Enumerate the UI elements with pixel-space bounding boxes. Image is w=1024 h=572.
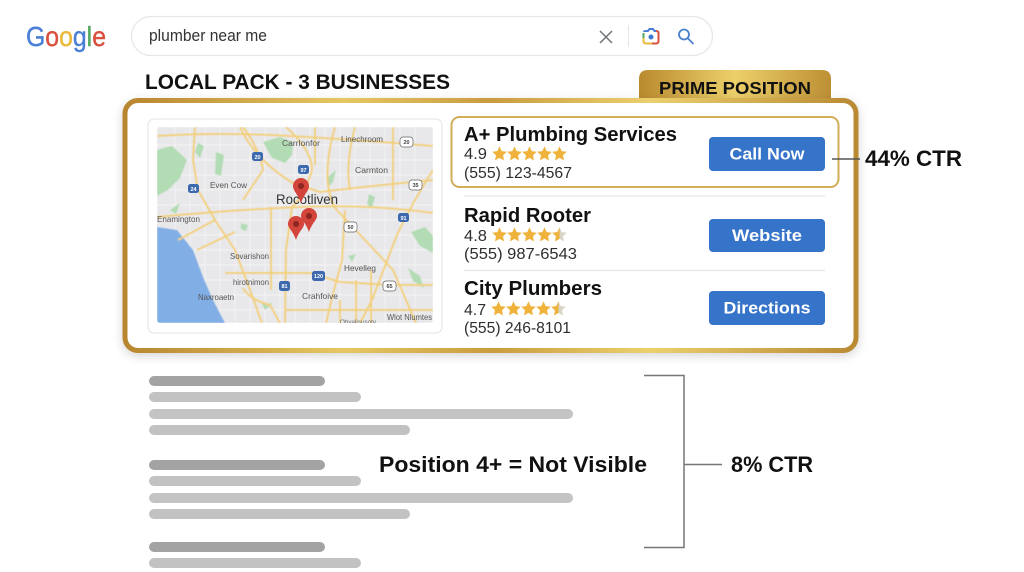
map labels: Carmton bbox=[355, 165, 388, 175]
map labels: Even Cow bbox=[210, 180, 248, 190]
minor street grid bbox=[174, 144, 416, 311]
listing: City Plumbers: City Plumbers bbox=[464, 278, 602, 300]
route shields: 97 bbox=[300, 168, 307, 174]
button: directions: Directions bbox=[724, 298, 810, 318]
listing: Rapid Rooter: Rapid Rooter bbox=[464, 205, 591, 227]
map labels: Carrlonfor bbox=[282, 138, 320, 148]
highlight: top listing bbox=[452, 117, 838, 187]
listing: A+ Plumbing Services: 4.9 bbox=[464, 146, 487, 163]
icon: map pin 2 bbox=[301, 208, 317, 232]
route shields: 91 bbox=[400, 216, 407, 222]
icon: map pin 3 bbox=[288, 216, 304, 240]
map labels: Naxroaetn bbox=[198, 292, 234, 302]
heading: local pack: LOCAL PACK - 3 BUSINESSES bbox=[145, 71, 450, 94]
map card bbox=[148, 119, 442, 333]
route shields: 81 bbox=[281, 284, 288, 290]
route shields: 50 bbox=[347, 225, 354, 231]
water bbox=[157, 227, 225, 323]
listing: A+ Plumbing Services bbox=[464, 124, 825, 182]
rating stars bbox=[492, 227, 567, 241]
map labels: Rocotliven bbox=[276, 191, 338, 207]
icon: search bbox=[679, 30, 694, 44]
placeholder organic results bbox=[149, 376, 573, 568]
listing: City Plumbers: (555) 246-8101 bbox=[464, 320, 571, 337]
label: position 4+: Position 4+ = Not Visible bbox=[379, 452, 647, 477]
listing: Rapid Rooter bbox=[464, 205, 825, 263]
highways bbox=[157, 127, 433, 323]
rating stars bbox=[492, 146, 567, 160]
map labels: Sovarishon bbox=[230, 251, 269, 261]
icon: camera bbox=[644, 29, 658, 44]
map labels: hirotnimon bbox=[233, 277, 269, 287]
map labels: Linechroom bbox=[341, 134, 383, 144]
map labels: Ohvalisusoty bbox=[340, 320, 376, 326]
map labels: Hevelleg bbox=[344, 263, 376, 273]
listing: A+ Plumbing Services: (555) 123-4567 bbox=[464, 165, 572, 182]
map labels: Wlot Nlumtes bbox=[387, 312, 432, 322]
route shields: 20 bbox=[254, 155, 261, 161]
route shields bbox=[188, 137, 422, 291]
button: call now bbox=[709, 137, 825, 171]
parks bbox=[157, 137, 433, 310]
route shields: 35 bbox=[412, 183, 419, 189]
map labels bbox=[157, 134, 432, 326]
map labels: Enamington bbox=[157, 214, 200, 224]
rating stars bbox=[491, 301, 566, 315]
callout: 8% CTR: 8% CTR bbox=[731, 452, 813, 477]
map labels: Crahfoive bbox=[302, 291, 338, 301]
button: call now: Call Now bbox=[730, 144, 805, 164]
route shields: 65 bbox=[386, 284, 393, 290]
bracket bbox=[644, 376, 722, 548]
search bar bbox=[132, 16, 712, 56]
listing: City Plumbers: 4.7 bbox=[464, 302, 486, 319]
listing: Rapid Rooter: (555) 987-6543 bbox=[464, 246, 577, 263]
panel: local pack bbox=[125, 100, 856, 350]
Google logo: Google bbox=[26, 21, 106, 52]
badge: prime position: PRIME POSITION bbox=[659, 78, 811, 98]
search query: plumber near me bbox=[149, 27, 267, 45]
badge: prime position bbox=[639, 70, 831, 104]
listing: City Plumbers bbox=[464, 278, 825, 337]
icon: clear bbox=[600, 31, 612, 43]
listing: Rapid Rooter: 4.8 bbox=[464, 228, 487, 245]
icon: map pin 1 bbox=[293, 178, 309, 203]
button: directions bbox=[709, 291, 825, 325]
button: website bbox=[709, 219, 825, 252]
route shields: 24 bbox=[190, 187, 197, 193]
button: website: Website bbox=[732, 226, 802, 245]
route shields: 120 bbox=[314, 274, 323, 280]
callout: 44% CTR: 44% CTR bbox=[865, 146, 962, 171]
listing: A+ Plumbing Services: A+ Plumbing Services bbox=[464, 124, 677, 146]
route shields: 20 bbox=[403, 140, 410, 146]
